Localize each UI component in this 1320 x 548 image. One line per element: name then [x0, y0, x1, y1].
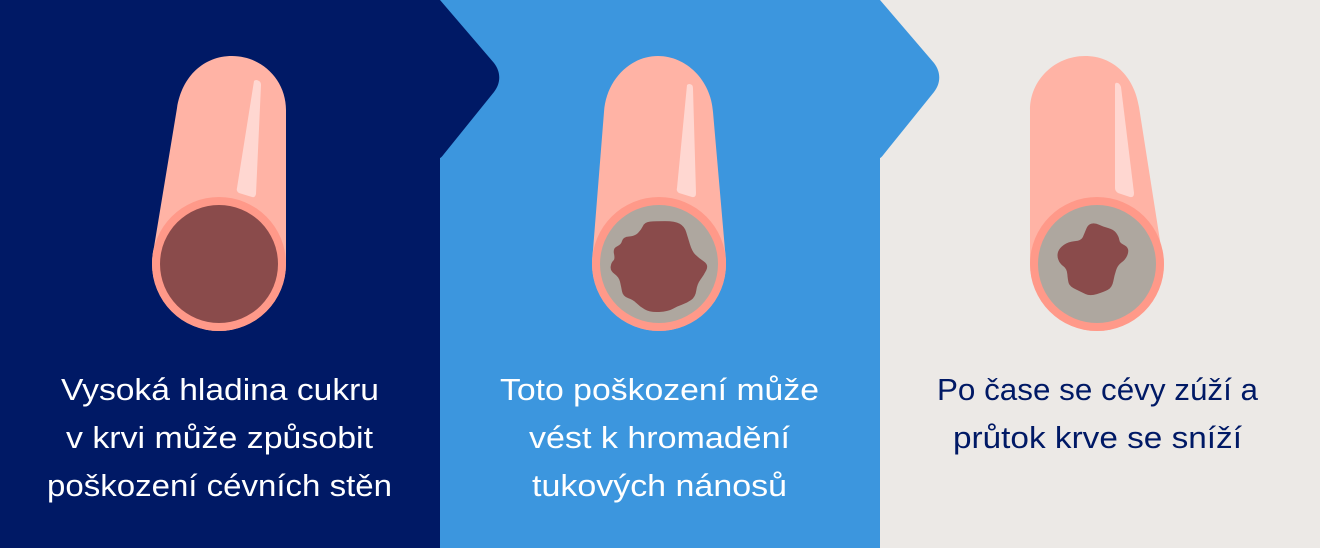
text: step 2 description: vést k hromadění — [529, 420, 790, 455]
deposit: narrowed lumen — [1058, 224, 1128, 295]
text: step 3 description — [937, 372, 1259, 455]
text: step 3 description: Po čase se cévy zúží a — [937, 372, 1259, 407]
text: step 1 description — [47, 372, 392, 503]
deposit: remaining lumen — [611, 222, 707, 312]
text: step 1 description: Vysoká hladina cukru — [61, 372, 379, 407]
text: step 2 description: tukových nánosů — [532, 468, 787, 503]
text: step 1 description: v krvi může způsobit — [66, 420, 373, 455]
panel: step 3 background — [880, 0, 1320, 548]
panel: step 2 background with arrow — [440, 0, 939, 548]
text: step 1 description: poškození cévních stěn — [47, 468, 392, 503]
text: step 3 description: průtok krve se sníží — [953, 420, 1242, 455]
panel: step 1 background with arrow — [0, 0, 499, 548]
text: step 2 description: Toto poškození může — [500, 372, 819, 407]
icon: healthy blood vessel — [152, 56, 286, 331]
icon: vessel with fatty deposits — [592, 56, 726, 331]
icon: narrowed vessel — [1030, 56, 1164, 331]
text: step 2 description — [500, 372, 819, 503]
